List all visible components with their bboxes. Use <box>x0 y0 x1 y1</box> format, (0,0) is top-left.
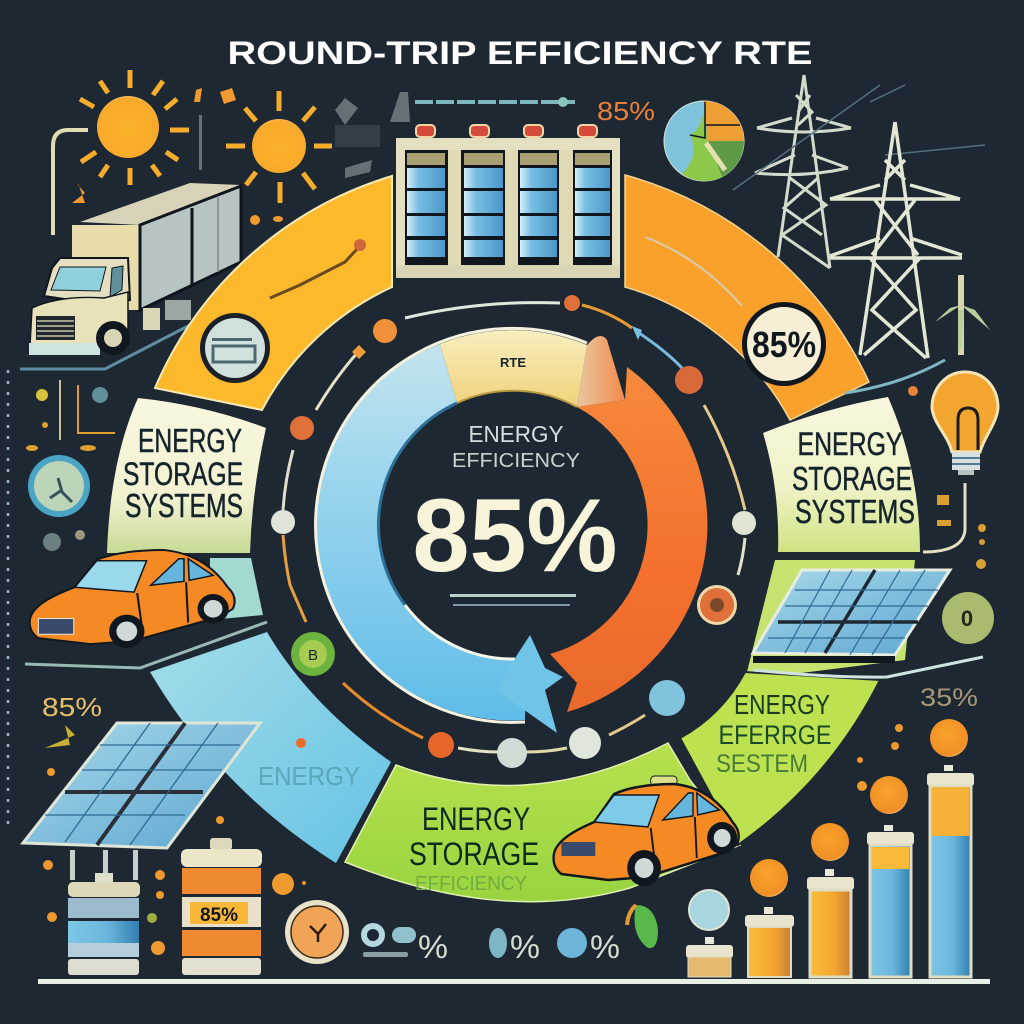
battery: orange: 85% <box>200 905 238 926</box>
arc: blue <box>316 344 526 720</box>
baseline <box>38 979 990 984</box>
node: green: B <box>308 647 318 664</box>
ring segment: green bottom: STORAGE <box>409 836 539 872</box>
bar 5 <box>927 765 974 977</box>
road above light bulb <box>845 360 945 393</box>
node: orange upper right <box>675 366 703 394</box>
arc rim inner left <box>378 403 457 605</box>
bar 3 <box>807 869 854 977</box>
ring segment: yellow <box>155 176 392 410</box>
labels: bottom percent row: % <box>590 929 620 965</box>
node: blue diamond <box>632 326 642 340</box>
arc rim outer <box>316 328 587 722</box>
center label: energy efficiency <box>412 421 618 606</box>
battery: orange <box>181 838 262 975</box>
labels: percentages left and right: 85% <box>42 692 102 722</box>
panel: energy storage systems right: ENERGY <box>798 426 902 462</box>
icon: orange dial <box>285 900 349 964</box>
coin 2 <box>750 859 788 897</box>
node: orange left <box>290 416 314 440</box>
faint sketch icons top <box>199 92 410 178</box>
car left <box>30 550 235 648</box>
icon: gauge left <box>28 455 90 517</box>
coin 3 <box>811 823 849 861</box>
label: energy: ENERGY <box>258 761 360 791</box>
arc rim inner yellow <box>457 391 577 407</box>
node: orange bottom <box>428 732 454 758</box>
panel: energy storage systems left <box>107 398 266 553</box>
arc: orange <box>550 367 707 712</box>
icon: coin right <box>942 592 994 644</box>
icon: coin right: 0 <box>961 606 973 631</box>
small text on yellow band: RTE <box>500 355 526 370</box>
ring segment: green right <box>680 560 915 845</box>
specks near bulb <box>908 386 986 569</box>
orange tip <box>354 239 366 251</box>
decorative specks <box>43 724 903 955</box>
arc: pale yellow <box>440 330 587 407</box>
scribble arrow <box>270 248 358 298</box>
ring segment: green bottom: ENERGY <box>422 801 530 837</box>
arrowhead: blue <box>497 635 563 733</box>
top dashed link with 85% label <box>415 96 655 126</box>
panel: energy storage systems right <box>763 397 920 552</box>
labels: bottom percent row: % <box>510 929 540 965</box>
node: blue <box>649 680 685 716</box>
labels: bottom percent row <box>363 926 620 965</box>
labels: percentages left and right <box>42 684 978 722</box>
ring segment: orange <box>625 175 869 420</box>
node: orange top <box>564 295 580 311</box>
center value: 85% <box>412 478 618 594</box>
label: right percent: 35% <box>920 684 978 712</box>
icon: transmission tower 1 <box>733 75 985 268</box>
ring segment: green right: EFERRGE <box>718 720 832 750</box>
node: white right <box>732 511 756 535</box>
battery pack <box>396 125 620 278</box>
center label: energy efficiency: ENERGY <box>468 421 564 447</box>
icon: transmission tower 2 <box>830 122 962 358</box>
badge: yellow segment icon <box>200 313 270 383</box>
badge: 85%: 85% <box>752 324 816 365</box>
icon: truck <box>29 183 241 355</box>
node: white bottom right <box>569 727 601 759</box>
small decorations top left <box>72 88 283 225</box>
solar panel right <box>753 570 983 677</box>
panel: energy storage systems right: SYSTEMS <box>795 493 915 530</box>
ring segment: green bottom: EFFICIENCY <box>415 873 527 895</box>
decorations left of panel <box>26 380 115 551</box>
coin 5 <box>930 719 968 757</box>
panel: energy storage systems left: STORAGE <box>123 456 243 492</box>
road under truck <box>20 325 190 369</box>
ring segment: green bottom <box>345 743 740 902</box>
icon: large sun <box>80 70 189 185</box>
node: small diamond <box>352 345 366 359</box>
center underline <box>450 594 576 606</box>
arc: pale orange tip <box>577 336 625 407</box>
node: orange top-left <box>373 319 397 343</box>
labels: bottom percent row: % <box>418 929 448 965</box>
coin 1 <box>689 890 729 930</box>
bar 1 <box>686 937 733 977</box>
solar panel left <box>23 723 260 848</box>
node: white left <box>271 510 295 534</box>
central donut gauge <box>316 328 707 733</box>
bar 4 <box>867 825 914 977</box>
panel: energy storage systems left: SYSTEMS <box>125 487 243 524</box>
title: ROUND-TRIP EFFICIENCY RTE <box>228 35 812 71</box>
center label: energy efficiency: EFFICIENCY <box>452 450 580 472</box>
label: 85%: 85% <box>597 96 655 126</box>
car on green <box>554 776 739 886</box>
ring strip: teal behind left car <box>210 558 263 620</box>
node: white bottom <box>497 738 527 768</box>
road under left car <box>25 622 267 668</box>
connector line from sun to truck <box>53 130 88 235</box>
arc rim inner bottom <box>405 605 515 659</box>
ring segment: green right: SESTEM <box>716 750 808 778</box>
node: orange right <box>697 585 737 625</box>
icon: small sun <box>226 91 332 203</box>
node: green <box>291 632 335 676</box>
panel: energy storage systems left: ENERGY <box>138 422 242 459</box>
dotted left guide <box>7 370 9 825</box>
orange dot <box>296 738 306 748</box>
icon: light bulb <box>923 372 998 552</box>
connector ring with nodes <box>271 295 756 768</box>
bar 2 <box>745 907 794 977</box>
coin 4 <box>870 776 908 814</box>
icon: pie chart <box>664 101 744 181</box>
highlight stroke <box>645 237 742 306</box>
bar chart: battery levels <box>686 719 974 977</box>
ring segment: blue <box>150 632 391 863</box>
panel: energy storage systems right: STORAGE <box>792 460 912 497</box>
icon: wind turbine <box>935 275 990 355</box>
ring segment: green right: ENERGY <box>734 689 830 720</box>
badge: 85% <box>742 302 826 386</box>
icon: green leaf <box>627 905 658 948</box>
battery: blue <box>68 850 140 975</box>
